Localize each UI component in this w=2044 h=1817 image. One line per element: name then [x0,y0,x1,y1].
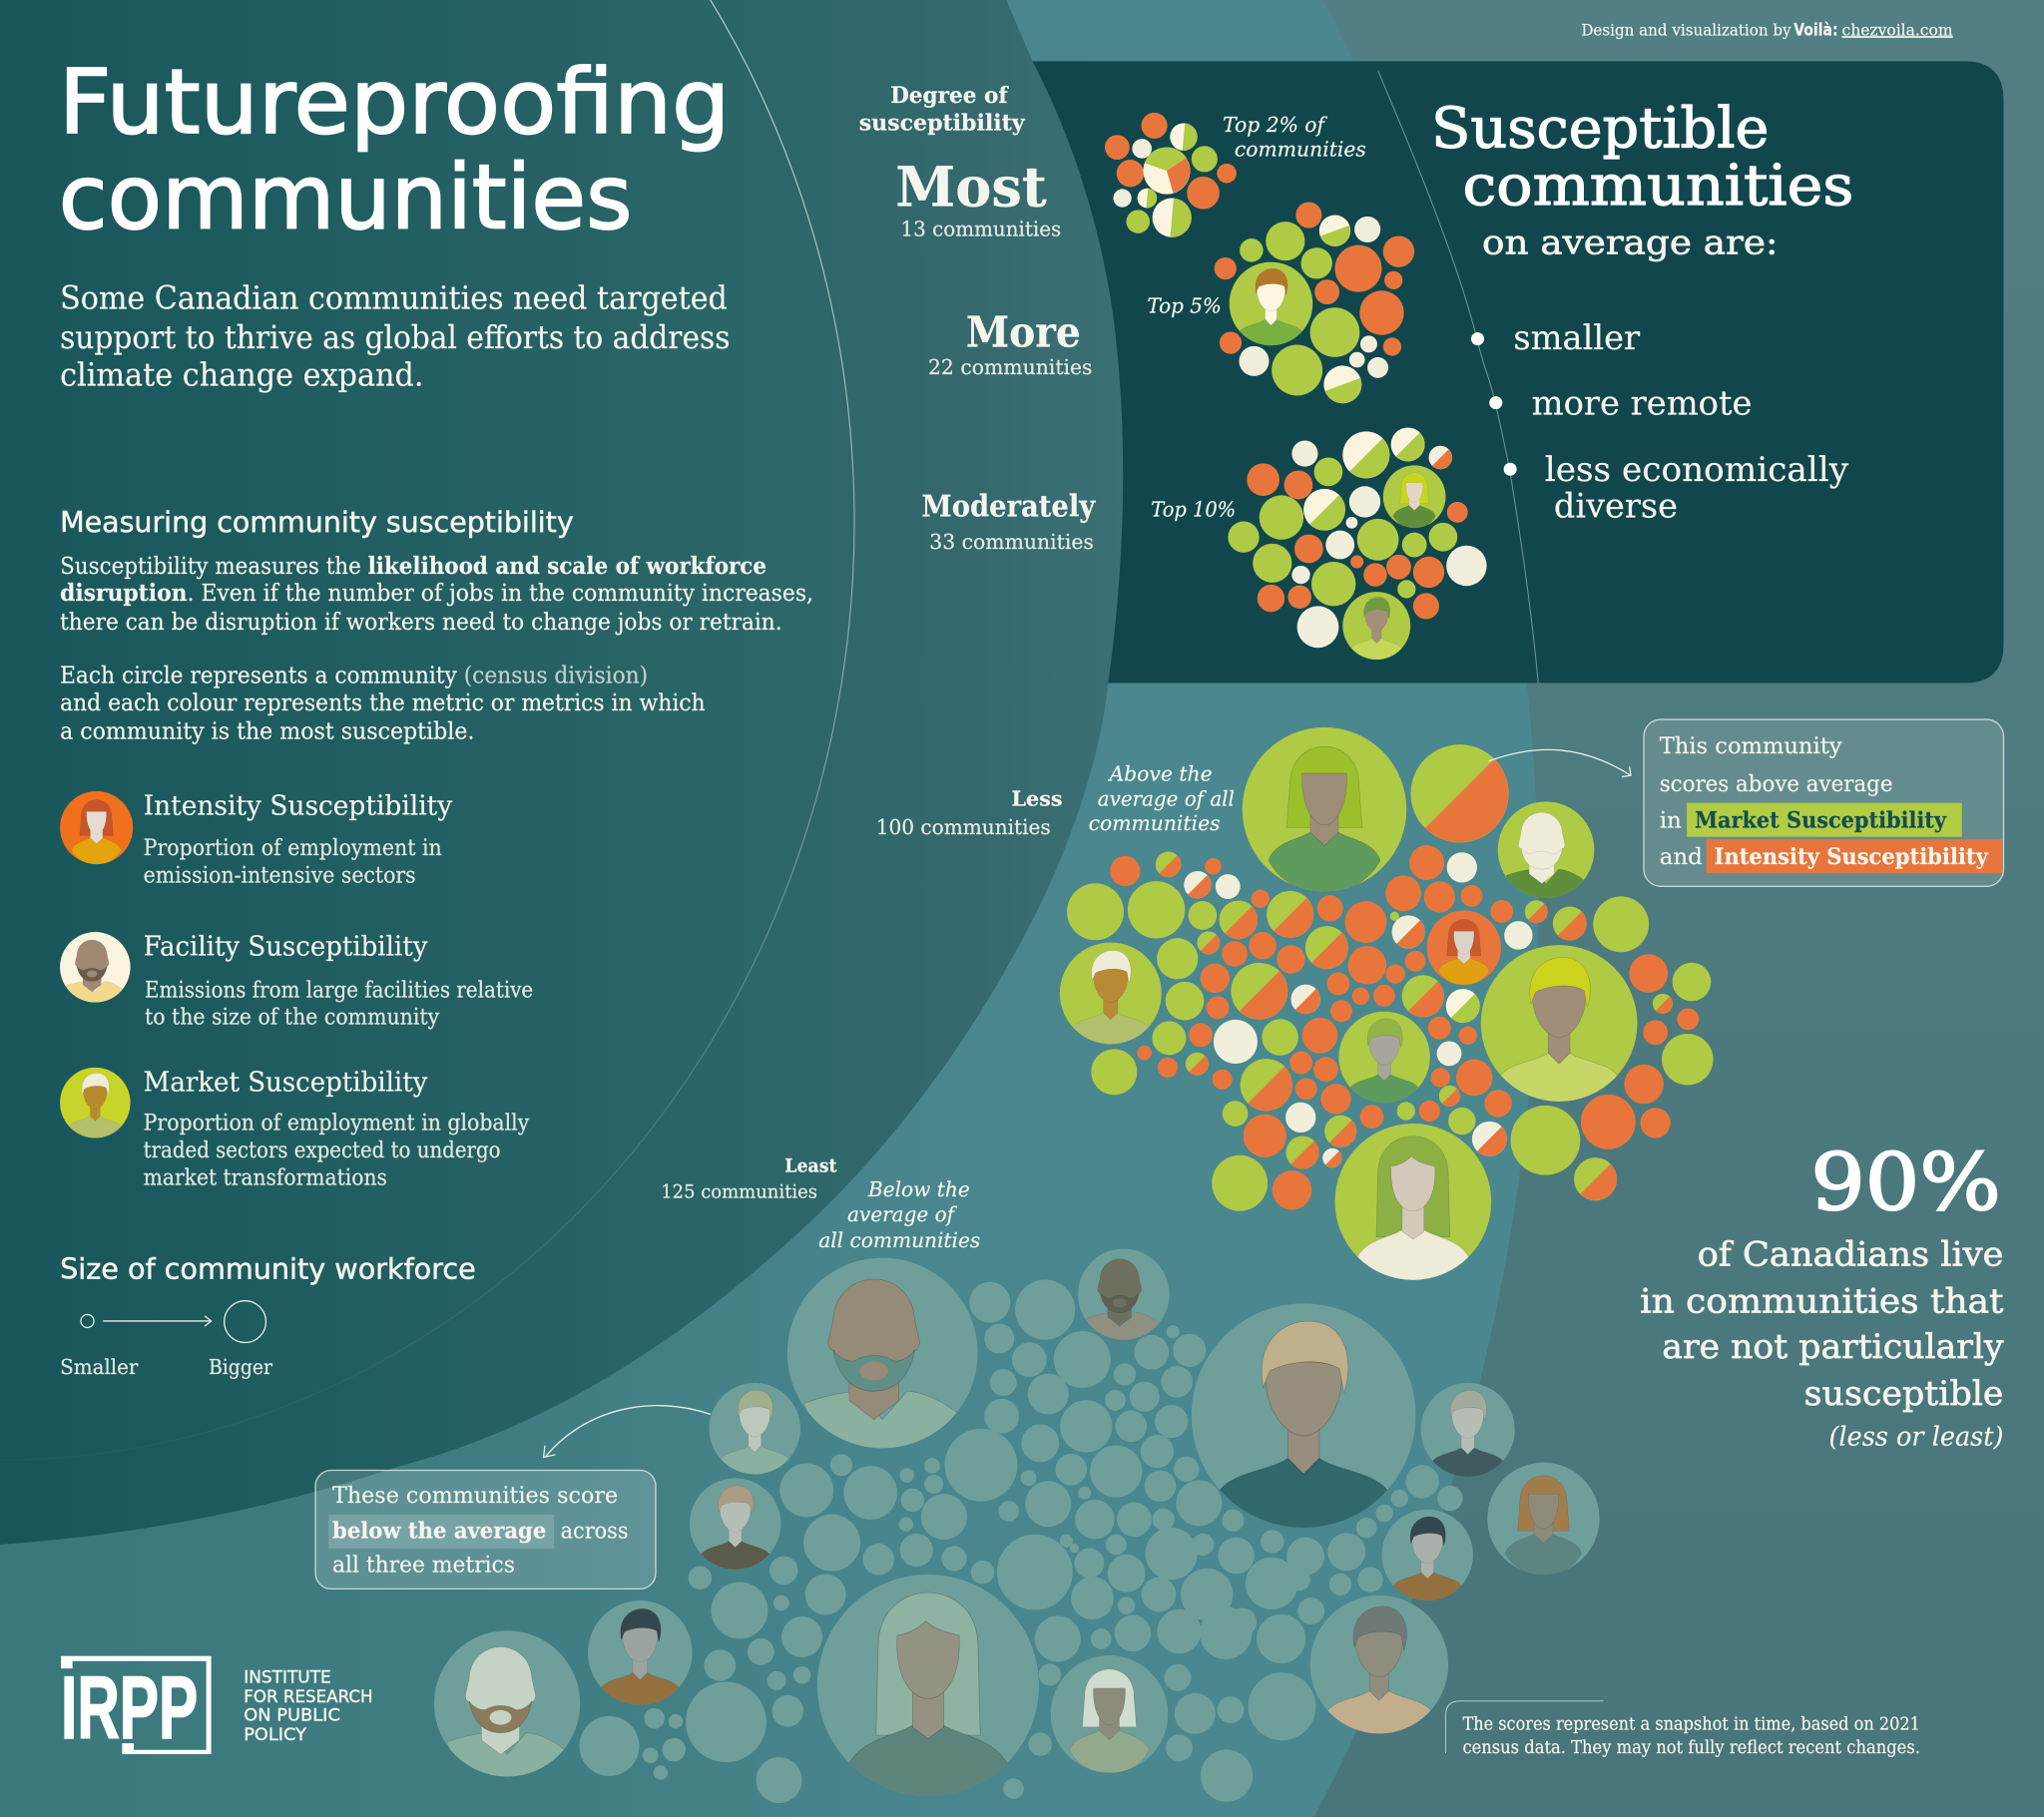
callout: above average: in [1660,808,1682,834]
label: more: More [966,307,1081,356]
heading: susceptible communities [1431,97,1853,263]
text block: susceptibility definition: disruption. Even if the number of jobs in the community increases, [60,579,813,607]
design credit: Voilà: [1793,20,1838,40]
label: least [661,1154,837,1203]
panel: susceptible communities [1032,61,2004,683]
bullet list: characteristics: less economically [1545,450,1849,490]
label: moderately [921,489,1097,554]
intro text: support to thrive as global efforts to address [60,320,730,356]
avatar: woman with green hair [1243,727,1406,893]
label: moderately: 33 communities [929,530,1094,554]
statistic: 90%: are not particularly [1662,1327,2004,1367]
legend: market susceptibility: Market Susceptibility [144,1067,428,1098]
text block: circle explanation: and each colour represents the metric or metrics in which [60,688,706,716]
callout: above average: Intensity Susceptibility [1715,844,1989,870]
heading: degree of susceptibility [859,83,1026,137]
design credit: Design and visualization by [1581,20,1791,39]
annotation: below average [818,1177,980,1252]
cluster: less susceptible communities [1060,727,1714,1283]
annotation: top 5%: Top 5% [1147,294,1222,318]
annotation: top 2%: Top 2% of [1223,113,1327,137]
light teal central band [0,0,1538,1817]
title: Futureproofing [59,51,730,154]
avatar: bearded man [1498,801,1594,899]
cluster: least susceptible communities [434,1248,1600,1803]
label: least: Least [784,1154,837,1176]
legend: intensity susceptibility: emission-intensive sectors [144,862,416,888]
avatar: large woman [1334,1124,1491,1283]
label: less: Less [1012,785,1062,810]
intro text [60,281,730,394]
avatar: dark-haired man left [588,1600,693,1707]
avatar: top 10% man [1342,592,1410,661]
legend: market susceptibility [60,1067,530,1190]
callout: below average: below the average [332,1518,546,1544]
statistic: 90% [1640,1137,2004,1453]
legend: intensity susceptibility [60,790,453,888]
annotation: above average: average of all [1098,786,1235,810]
callout: below average: across [561,1518,629,1544]
legend: facility susceptibility [60,932,533,1031]
callout: below average: all three metrics [332,1552,515,1578]
text block: circle explanation: Each circle represents a community (census division) [60,662,648,689]
annotation: top 2% [1223,113,1366,162]
legend: market susceptibility: traded sectors expected to undergo [144,1137,501,1163]
logo: IRPP: POLICY [244,1725,307,1745]
callout: above average: This community [1660,733,1842,759]
callout: above average: and [1660,844,1703,870]
size legend: community workforce: Bigger [209,1355,272,1379]
avatar: man with white hair [1060,942,1162,1047]
legend: market susceptibility: market transformations [144,1164,387,1190]
footnote [1445,1701,1920,1758]
label: most: Most [895,154,1047,219]
callout: above average [1644,719,2004,886]
bullet list: characteristics: more remote [1532,383,1752,423]
heading: degree of susceptibility: susceptibility [859,111,1026,137]
size legend: community workforce: Smaller [60,1355,138,1379]
logo: IRPP: IRPP [61,1658,198,1757]
callout: below average: These communities score [332,1483,618,1509]
logo: IRPP [61,1656,373,1757]
title [59,51,730,249]
logo: IRPP: ON PUBLIC [244,1705,340,1725]
avatar: bearded man large [787,1258,978,1449]
heading: measuring community susceptibility: Measuring community susceptibility [60,505,574,539]
bullet list: characteristics [1471,318,1849,527]
statistic: 90%: (less or least) [1828,1423,2004,1453]
statistic: 90%: 90% [1810,1137,2001,1228]
heading: susceptible communities: communities [1462,154,1853,219]
avatar: top 10% woman [1383,465,1445,529]
dark left panel [0,0,1123,1545]
label: more: 22 communities [928,355,1093,379]
avatar: dark-haired man right [1381,1510,1473,1602]
avatar: dark bearded man [1078,1248,1170,1340]
text block: susceptibility definition: there can be disruption if workers need to change jobs or retrain. [60,608,782,636]
avatar: large blond man [1192,1303,1415,1533]
logo: IRPP: FOR RESEARCH [244,1687,373,1707]
arrow: to market and intensity callout [1489,749,1631,777]
cluster: top 5% [1215,202,1414,410]
statistic: 90%: of Canadians live [1698,1234,2004,1274]
size legend: community workforce: Size of community workforce [60,1251,476,1285]
heading: degree of susceptibility: Degree of [890,83,1009,109]
callout: above average: Market Susceptibility [1695,808,1947,834]
avatar: large man [1481,945,1637,1105]
bullet list: characteristics: smaller [1513,318,1641,358]
label: most: 13 communities [901,217,1061,240]
text block: susceptibility definition [60,552,813,636]
design credit: chezvoila.com [1842,20,1953,39]
avatar: grey-haired man [1421,1383,1515,1479]
cluster: top 2% [1105,113,1237,245]
footnote: census data. They may not fully reflect recent changes. [1462,1738,1920,1758]
avatar: orange woman [1427,910,1501,986]
heading: susceptible communities: Susceptible [1431,97,1769,162]
pie circle [1143,148,1190,195]
logo: IRPP: INSTITUTE [244,1667,331,1687]
icon: market avatar [60,1068,131,1139]
footnote: The scores represent a snapshot in time, based on 2021 [1462,1714,1920,1734]
annotation: below average: Below the [867,1177,970,1201]
label: moderately: Moderately [921,489,1097,524]
callout: below average [315,1471,656,1589]
label: most [895,154,1061,240]
callout: above average: scores above average [1660,771,1892,797]
text block: susceptibility definition: Susceptibility measures the likelihood and scale of workforce [60,552,766,580]
label: less: 100 communities [876,815,1051,839]
avatar: bearded man brown beard [434,1630,580,1777]
cluster: top 10% [1228,427,1487,661]
statistic: 90%: susceptible [1804,1374,2004,1414]
legend: facility susceptibility: to the size of the community [145,1005,440,1031]
annotation: above average: Above the [1108,761,1213,785]
icon: intensity avatar [60,791,133,865]
legend: intensity susceptibility: Intensity Susceptibility [144,790,453,821]
arrow: to below-average callout [544,1406,711,1457]
title: communities [59,147,632,249]
avatar: long-haired woman large [817,1575,1039,1801]
annotation: top 10%: Top 10% [1151,497,1236,521]
avatar: auburn woman [1487,1463,1600,1576]
text block: circle explanation [60,662,706,745]
annotation: above average: communities [1089,811,1221,835]
annotation: top 2%: communities [1235,138,1366,162]
intro text: Some Canadian communities need targeted [60,281,728,317]
legend: facility susceptibility: Emissions from large facilities relative [145,977,533,1003]
avatar: man with green hair [1338,1012,1430,1105]
avatar: white-haired woman [1051,1655,1168,1774]
label: less [876,785,1062,839]
heading: susceptible communities: on average are: [1482,224,1779,263]
size legend: community workforce [60,1251,476,1379]
annotation: below average: all communities [818,1228,980,1252]
icon: facility avatar [60,932,131,1003]
text block: circle explanation: a community is the most susceptible. [60,717,474,745]
avatar: top 5% [1230,262,1312,347]
avatar: man light hair [710,1383,800,1476]
intro text: climate change expand. [60,358,423,394]
avatar: man with tan shirt [1310,1595,1448,1736]
annotation: above average [1089,761,1235,835]
legend: market susceptibility: Proportion of employment in globally [144,1111,530,1136]
annotation: below average: average of [847,1202,957,1226]
legend: intensity susceptibility: Proportion of employment in [144,835,442,861]
label: more [928,307,1093,379]
bullet list: characteristics: diverse [1554,487,1678,527]
design credit [1581,20,1953,40]
thin arc line on left panel [0,0,854,1460]
statistic: 90%: in communities that [1640,1281,2004,1321]
avatar: man dark shirt [690,1478,780,1572]
legend: facility susceptibility: Facility Susceptibility [144,932,428,963]
label: least: 125 communities [661,1181,817,1203]
